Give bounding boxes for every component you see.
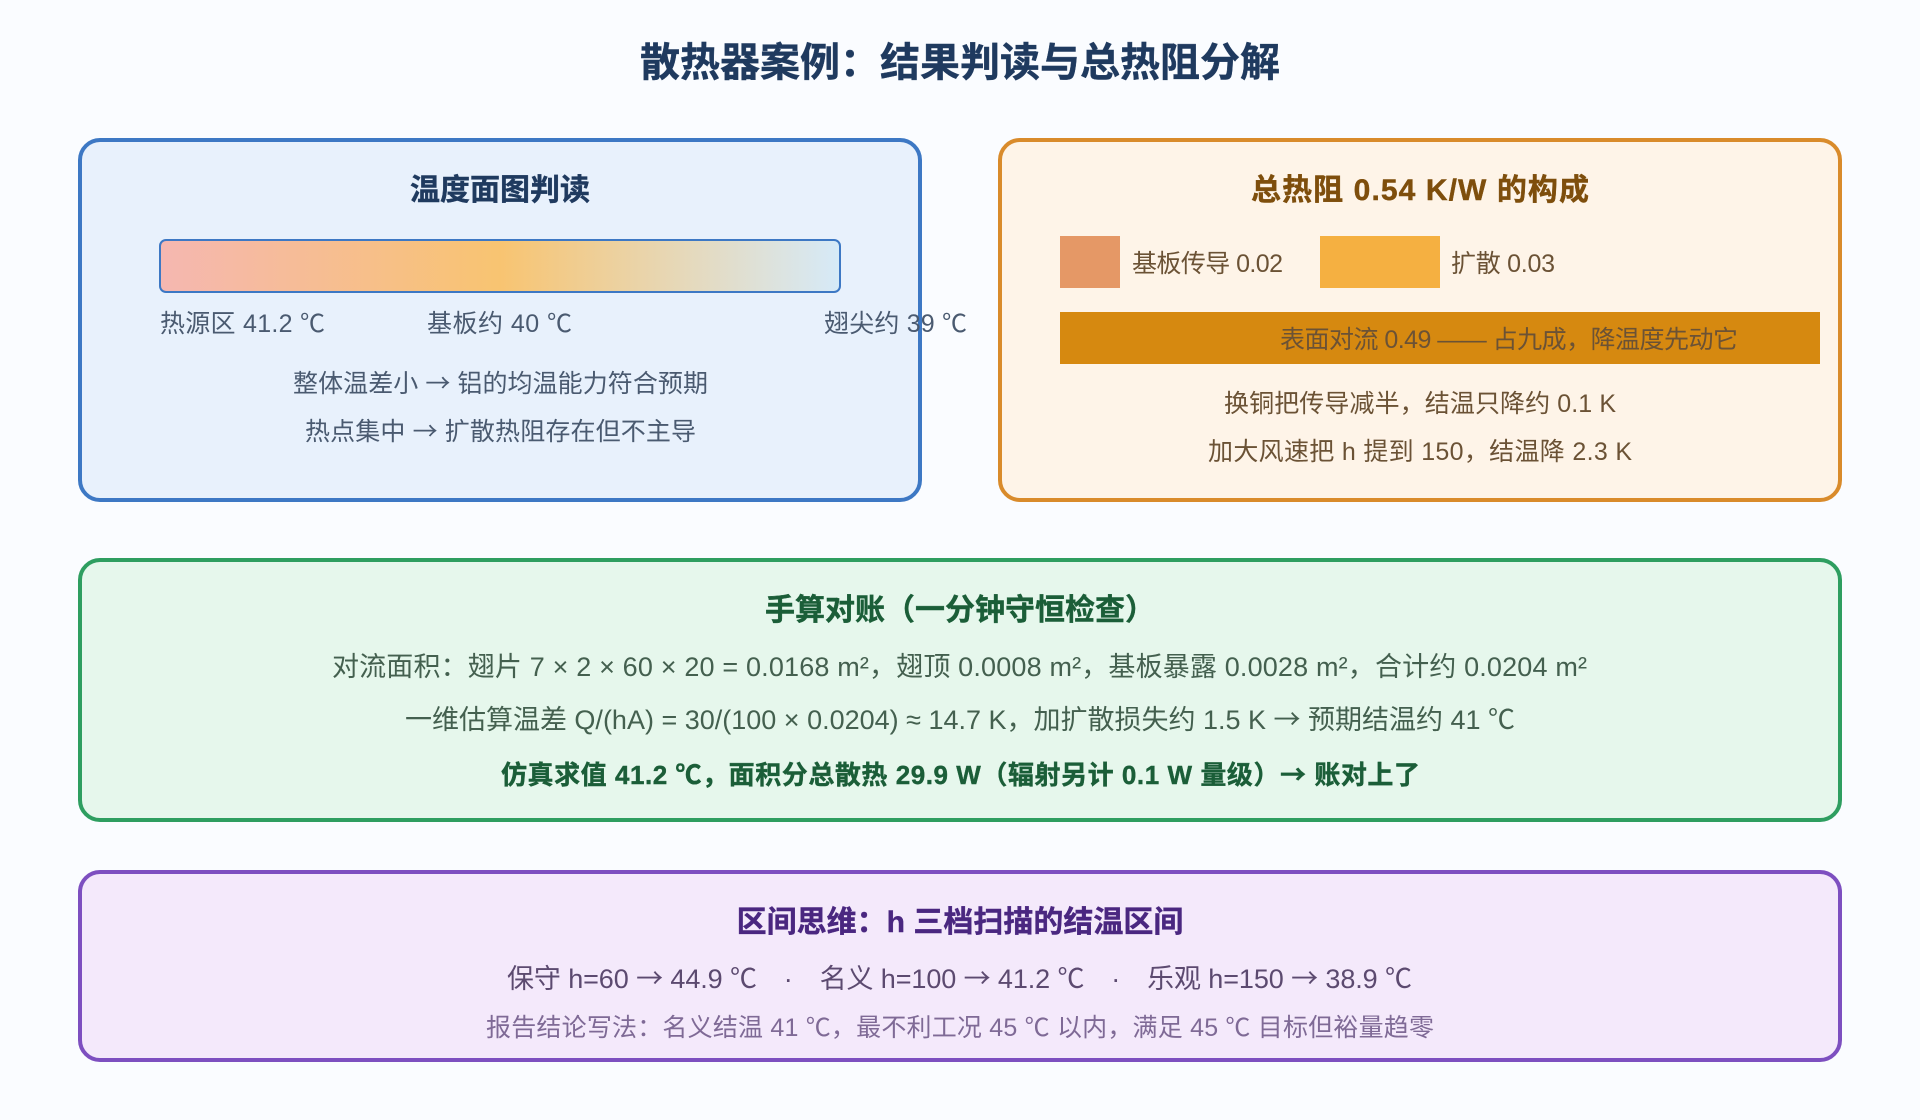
label: fin tip: 翅尖约 39 ℃ [824, 310, 967, 338]
text: hot spot: 热点集中 → 扩散热阻存在但不主导 [305, 412, 696, 448]
label: heat source: 热源区 41.2 ℃ [160, 310, 325, 338]
panel: thermal resistance [1000, 140, 1840, 500]
text: scan results: 保守 h=60 → 44.9 ℃ · 名义 h=100 → 41.2 ℃ · 乐观 h=150 → 38.9 ℃ [507, 957, 1412, 996]
label: base conduction: 基板传导 0.02 [1132, 250, 1283, 278]
text: report conclusion: 报告结论写法：名义结温 41 ℃，最不利工况 45 ℃ 以内，满足 45 ℃ 目标但裕量趋零 [486, 1014, 1434, 1042]
text: copper: 换铜把传导减半，结温只降约 0.1 K [1224, 390, 1616, 418]
heading: hand calculation: 手算对账（一分钟守恒检查） [765, 594, 1155, 627]
swatch: base conduction [1060, 236, 1120, 288]
text: estimate: 一维估算温差 Q/(hA) = 30/(100 × 0.0204) ≈ 14.7 K，加扩散损失约 1.5 K → 预期结温约 41 ℃ [405, 698, 1515, 737]
panel: hand calculation [80, 560, 1840, 820]
text: airflow: 加大风速把 h 提到 150，结温降 2.3 K [1208, 438, 1632, 466]
text: area: 对流面积：翅片 7 × 2 × 60 × 20 = 0.0168 m²，翅顶 0.0008 m²，基板暴露 0.0028 m²，合计约 0.0204 m² [332, 652, 1587, 682]
text: uniformity: 整体温差小 → 铝的均温能力符合预期 [293, 364, 708, 400]
label: base: 基板约 40 ℃ [427, 310, 572, 338]
gradient bar [160, 240, 840, 292]
heading: thermal resistance: 总热阻 0.54 K/W 的构成 [1251, 174, 1589, 207]
title: 散热器案例：结果判读与总热阻分解 [640, 41, 1280, 85]
text: simulation conclusion: 仿真求值 41.2 ℃，面积分总散热 29.9 W（辐射另计 0.1 W 量级）→ 账对上了 [501, 755, 1420, 792]
heading: interval thinking: 区间思维：h 三档扫描的结温区间 [737, 906, 1183, 939]
panel: interval thinking [80, 872, 1840, 1060]
heading: temperature reading: 温度面图判读 [410, 174, 590, 207]
swatch: spreading [1320, 236, 1440, 288]
panel: temperature reading [80, 140, 967, 500]
label: surface convection: 表面对流 0.49 —— 占九成，降温度先动它 [1280, 326, 1738, 354]
bar: surface convection [1060, 312, 1820, 364]
label: spreading: 扩散 0.03 [1451, 250, 1555, 278]
